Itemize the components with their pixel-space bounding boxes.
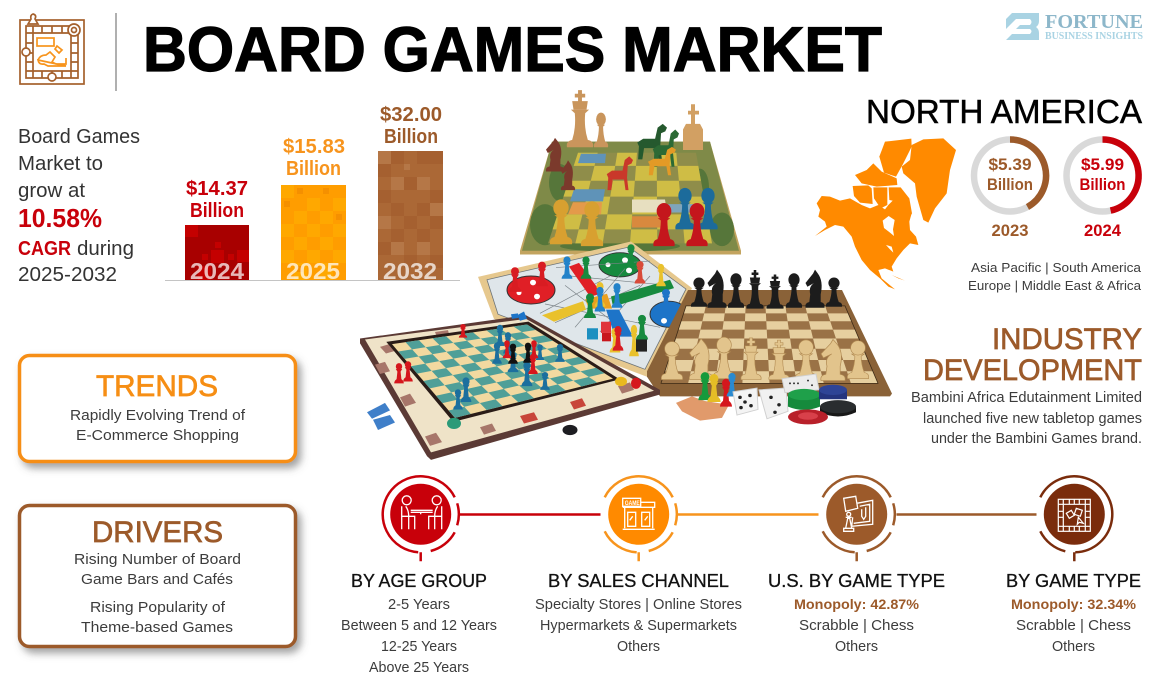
segment: U.S. by game type: U.S. BY GAME TYPE: [768, 570, 945, 591]
panel: industry development: INDUSTRY: [992, 323, 1142, 356]
text block: CAGR statement: grow at: [18, 179, 85, 202]
panel: trends: Rapidly Evolving Trend of: [70, 408, 246, 424]
bar: 2025: [281, 136, 346, 284]
donut chart: 2024: Billion: [1080, 175, 1126, 194]
donut chart: 2023: $5.39: [988, 155, 1032, 174]
segment: U.S. by game type: Scrabble | Chess: [799, 618, 914, 634]
map: North America: [815, 138, 956, 289]
bar: 2025: $15.83: [283, 136, 345, 158]
panel: drivers: [20, 506, 296, 646]
segment: U.S. by game type: [768, 570, 945, 655]
panel: industry development: under the Bambini Games brand.: [931, 431, 1142, 447]
bar: 2032: [378, 104, 443, 284]
text block: other regions: Asia Pacific | South America: [971, 260, 1142, 275]
panel: industry development: Bambini Africa Edutainment Limited: [911, 390, 1142, 406]
bar: 2025: Billion: [286, 158, 341, 180]
text block: CAGR statement: 10.58%: [18, 203, 102, 233]
board: ludo: [478, 241, 692, 377]
logo: Fortune Business Insights: BUSINESS INSIGHTS: [1045, 31, 1143, 42]
segment: U.S. by game type: Others: [835, 639, 878, 655]
donut chart: 2024: $5.99: [1081, 155, 1124, 174]
segment: by sales channel: BY SALES CHANNEL: [548, 570, 729, 591]
bar: 2032: 2032: [383, 258, 437, 284]
icon: board game logo: [20, 14, 84, 84]
segment: by sales channel: Others: [617, 639, 660, 655]
panel: drivers: DRIVERS: [92, 516, 223, 549]
white chess pieces: [661, 337, 869, 381]
segment: by game type: Monopoly: 32.34%: [1011, 596, 1137, 612]
text block: other regions: [968, 260, 1142, 293]
panel: drivers: Theme-based Games: [81, 620, 233, 636]
segment: by age group: [341, 570, 497, 676]
segment: by sales channel: Specialty Stores | Online Stores: [535, 597, 742, 613]
title: BOARD GAMES MARKET: [143, 15, 882, 85]
panel: industry development: [911, 323, 1142, 447]
illustration: board games collection: [360, 90, 892, 460]
pieces on teal board: [394, 311, 641, 429]
icon node: sales channel: [605, 476, 677, 561]
bar: 2032: $32.00: [380, 104, 442, 126]
icon node: game type: [1040, 476, 1112, 561]
icon node: U.S. game type: [823, 476, 895, 561]
accessories: meeples, tiles, dice and chips: [676, 372, 856, 424]
game pieces: tall chessmen and animals: [546, 90, 718, 246]
panel: trends: E-Commerce Shopping: [76, 428, 239, 444]
donut chart: 2024: [1066, 139, 1139, 240]
segment: by age group: BY AGE GROUP: [351, 570, 487, 591]
text block: CAGR statement: Board Games: [18, 125, 140, 148]
bar: 2025: 2025: [286, 258, 340, 284]
board: walnut chess board: [647, 270, 892, 396]
logo: Fortune Business Insights: [1006, 11, 1143, 42]
segment: by game type: [1006, 570, 1141, 655]
panel: trends: [20, 356, 296, 462]
segment: by game type: BY GAME TYPE: [1006, 570, 1141, 591]
heading: North America: NORTH AMERICA: [866, 93, 1142, 130]
segment: by game type: Others: [1052, 639, 1095, 655]
bar: 2024: [185, 178, 249, 284]
segment: by age group: 12-25 Years: [381, 639, 457, 655]
board: frame game with teal checker: [360, 311, 660, 460]
text block: CAGR statement: CAGR: [18, 237, 71, 260]
donut chart: 2023: Billion: [987, 175, 1033, 194]
logo: Fortune Business Insights: FORTUNE: [1045, 11, 1143, 33]
segment: by game type: Scrabble | Chess: [1016, 618, 1131, 634]
icon node: sales channel: GAME: [625, 501, 640, 507]
text block: other regions: Europe | Middle East & Africa: [968, 278, 1142, 293]
panel: industry development: launched five new tabletop games: [923, 411, 1142, 427]
segment: by sales channel: [535, 570, 742, 655]
board: adventure game: [520, 90, 741, 255]
black chess pieces: [691, 270, 842, 309]
bar: 2032: Billion: [384, 126, 438, 148]
text block: CAGR statement: during: [77, 237, 134, 260]
segment: U.S. by game type: Monopoly: 42.87%: [794, 596, 920, 612]
loose pieces: tiles and disc: [367, 403, 578, 435]
text block: CAGR statement: Market to: [18, 152, 103, 175]
text block: CAGR statement: [18, 125, 140, 286]
bar: 2024: 2024: [190, 258, 244, 284]
donut chart: 2023: 2023: [992, 222, 1028, 240]
donut chart: 2023: [974, 139, 1046, 240]
bar chart: [165, 104, 460, 284]
segment: by age group: 2-5 Years: [388, 597, 450, 613]
segment: by age group: Above 25 Years: [369, 660, 469, 676]
segment: by age group: Between 5 and 12 Years: [341, 618, 497, 634]
panel: drivers: Rising Popularity of: [90, 600, 226, 616]
divider: [115, 13, 117, 91]
text block: CAGR statement: 2025-2032: [18, 263, 117, 286]
bar: 2024: Billion: [190, 200, 244, 222]
donut chart: 2024: 2024: [1084, 222, 1122, 240]
panel: trends: TRENDS: [96, 370, 218, 403]
connector lines: [460, 513, 1036, 516]
segment: by sales channel: Hypermarkets & Supermarkets: [540, 618, 737, 634]
icon node: age group: [383, 476, 459, 561]
panel: drivers: Game Bars and Cafés: [81, 572, 233, 588]
panel: industry development: DEVELOPMENT: [923, 354, 1142, 387]
ludo pawns and dice: [509, 244, 672, 356]
panel: drivers: Rising Number of Board: [74, 552, 241, 568]
bar: 2024: $14.37: [186, 178, 248, 200]
